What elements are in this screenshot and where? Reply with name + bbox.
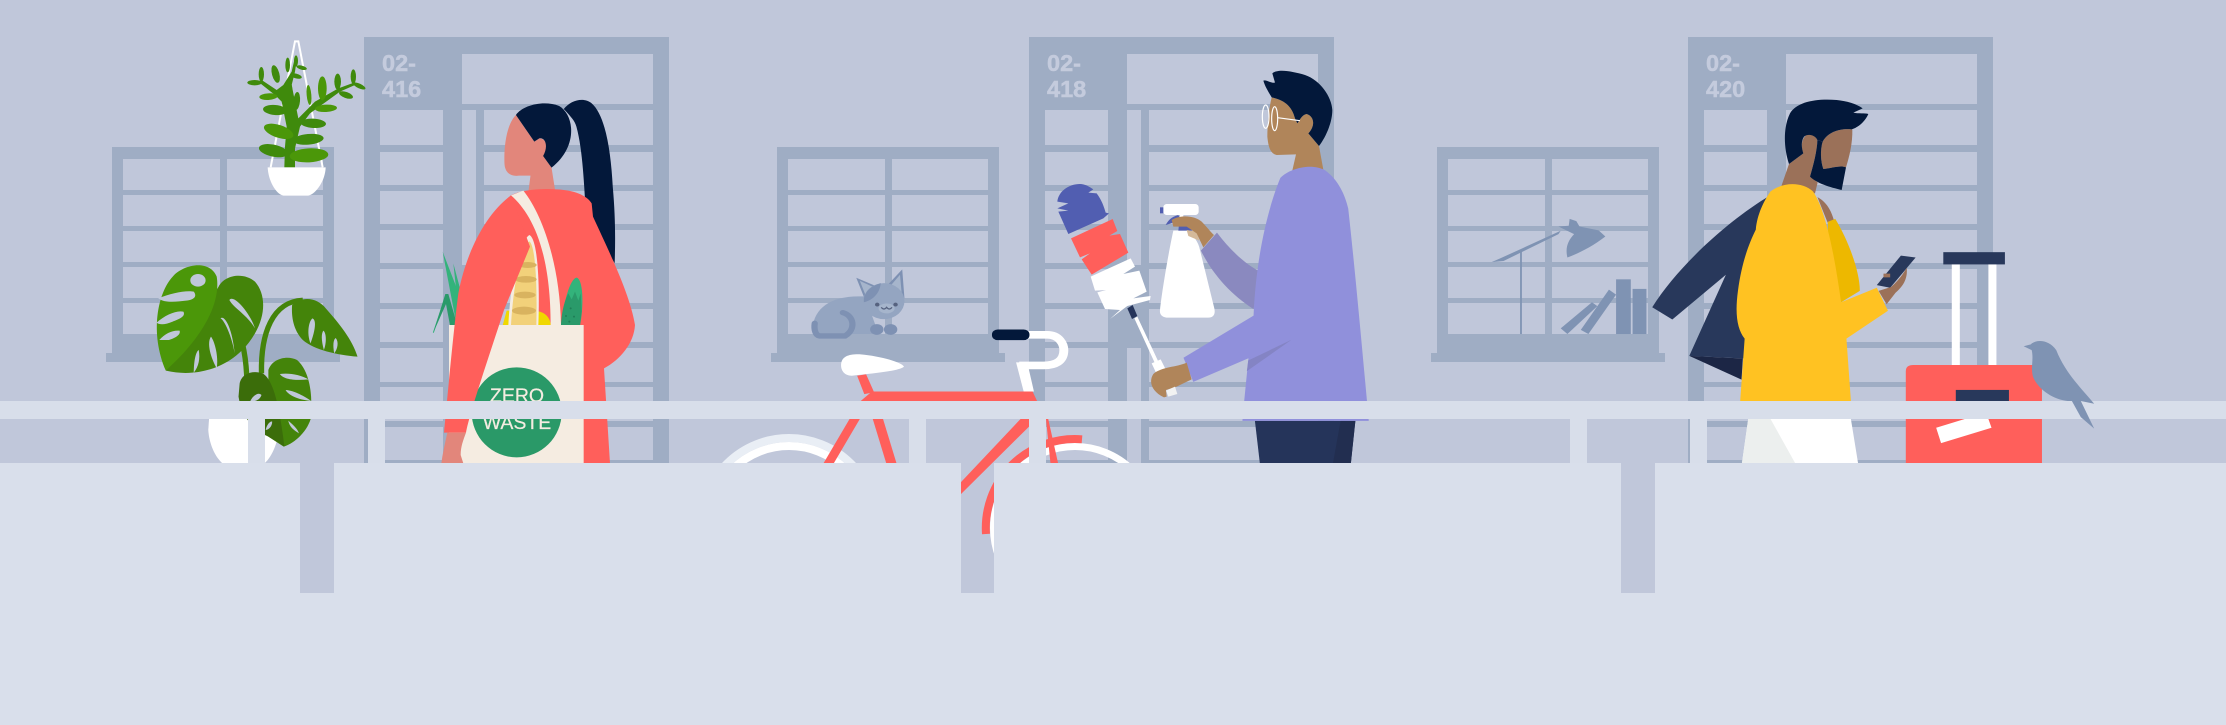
hanging plant [247, 41, 366, 196]
jacket [1652, 195, 1771, 380]
bicycle [701, 329, 1156, 614]
spray bottle [1160, 204, 1215, 318]
door 02-416 [364, 37, 669, 463]
cucumber [561, 278, 582, 325]
back hand [1172, 216, 1214, 247]
walkway railing [0, 401, 2226, 463]
hair [1263, 71, 1332, 146]
handlebar grip [992, 329, 1029, 340]
back wheel [701, 438, 877, 614]
window 2 [771, 147, 1005, 362]
ponytail [564, 100, 615, 263]
tote bag [449, 325, 584, 463]
hand [1879, 268, 1907, 304]
front wheel [986, 439, 1156, 610]
unit number 418: 02- [1047, 50, 1081, 76]
door 02-420 [1688, 37, 1993, 463]
window 3 with lamp and books [1431, 147, 1665, 362]
unit number 418: 418 [1047, 76, 1086, 102]
man with phone and jacket [1652, 100, 1916, 463]
neck and ear [1780, 134, 1818, 193]
front sleeve [1183, 306, 1292, 382]
woman with zero waste tote bag [433, 100, 635, 463]
badge text: WASTE [483, 412, 551, 434]
sweater [1242, 167, 1369, 421]
unit number 416: 416 [382, 76, 421, 102]
back sleeve [1201, 233, 1260, 309]
head tube [1016, 362, 1034, 391]
trousers [1255, 421, 1355, 463]
face and neck [504, 115, 556, 197]
hair [1785, 100, 1868, 164]
woman's arm [444, 195, 530, 433]
red top [510, 189, 635, 463]
unit number 420: 02- [1706, 50, 1740, 76]
zero waste badge [472, 367, 562, 457]
glasses [1262, 105, 1300, 131]
hand [441, 433, 466, 463]
trousers [1742, 419, 1858, 463]
tote strap [511, 191, 561, 325]
leek in bag [433, 252, 461, 333]
saddle [841, 354, 904, 376]
door 02-418 [1029, 37, 1334, 463]
walkway deck with pillar gaps [0, 463, 2226, 725]
hair [516, 103, 571, 168]
bird on railing [2024, 341, 2094, 429]
cat on window sill [813, 269, 904, 336]
red suitcase [1906, 252, 2042, 463]
badge text: ZERO [490, 385, 544, 407]
handlebar [1019, 335, 1064, 365]
bike frame [824, 374, 1058, 495]
shoulder and back sleeve [1817, 197, 1860, 302]
beard [1810, 140, 1846, 190]
unit number 420: 420 [1706, 76, 1745, 102]
unit number 416: 02- [382, 50, 416, 76]
face [1821, 129, 1852, 169]
yellow sweater [1737, 184, 1888, 401]
head [1267, 97, 1324, 173]
feather duster [1057, 184, 1166, 374]
monstera plant in white pot [157, 265, 358, 463]
front hand [1151, 363, 1192, 397]
phone [1877, 256, 1916, 288]
lemon [503, 311, 551, 325]
window 1 [106, 147, 340, 362]
baguette [508, 235, 539, 325]
man cleaning with duster and spray [1057, 71, 1369, 463]
